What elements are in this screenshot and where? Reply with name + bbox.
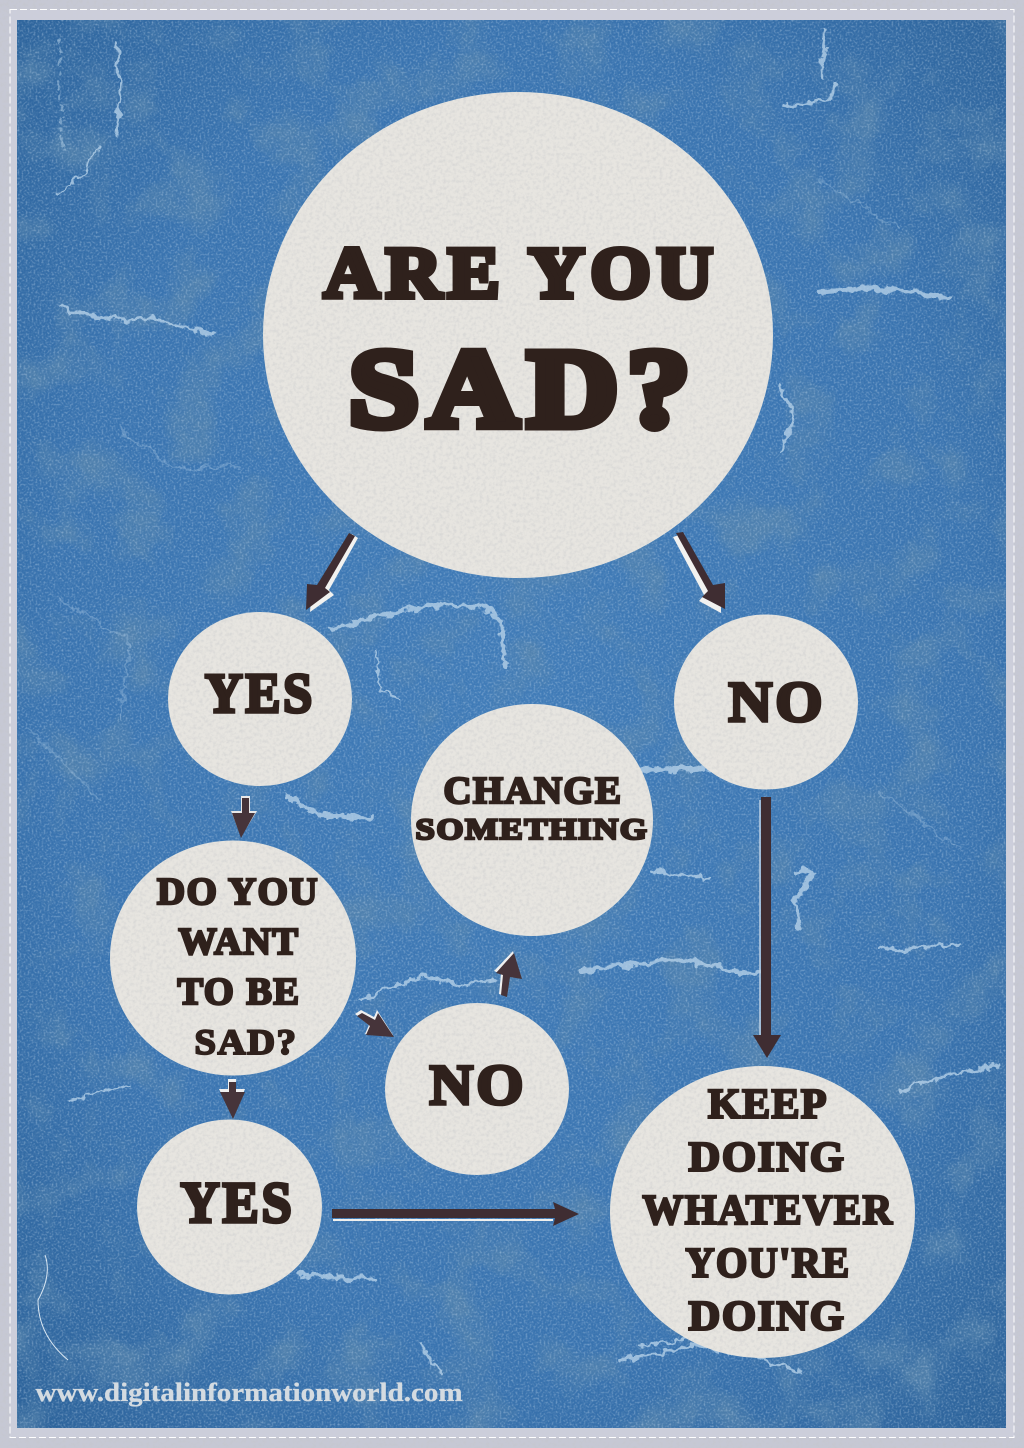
heading: are you: ARE YOU	[324, 233, 719, 313]
circle texture	[110, 92, 915, 1358]
arrow: big circle to yes	[306, 533, 358, 612]
circle: yes	[168, 612, 352, 786]
label: change something: SOMETHING	[416, 813, 648, 846]
label: keep doing whatever you're doing: WHATEVER	[642, 1188, 894, 1234]
label: do you want to be sad: DO YOU	[157, 871, 319, 913]
circle: yes lower	[137, 1120, 322, 1294]
label: keep doing whatever you're doing: DOING	[688, 1135, 846, 1181]
circle: keep doing	[610, 1066, 915, 1358]
label: no right: NO	[728, 671, 826, 734]
arrow: do you want to yes	[219, 1079, 245, 1119]
arrow: yes to do you want	[231, 796, 257, 838]
circle: no right	[674, 614, 858, 790]
label: keep doing whatever you're doing	[642, 1082, 894, 1340]
heading: sad: SAD?	[349, 328, 699, 451]
label: do you want to be sad: TO BE	[178, 971, 300, 1013]
label: no middle: NO	[430, 1054, 526, 1117]
circle: no middle	[385, 1003, 569, 1175]
label: keep doing whatever you're doing: DOING	[688, 1294, 846, 1340]
label: yes lower: YES	[180, 1170, 294, 1235]
label: change something	[416, 770, 648, 846]
arrow: do you want to no	[355, 1010, 394, 1037]
label: yes: YES	[205, 663, 315, 725]
arrow: no to keep doing	[753, 797, 781, 1058]
label: keep doing whatever you're doing: KEEP	[708, 1082, 828, 1128]
circle: change something	[411, 704, 653, 936]
arrow: yes to keep doing	[332, 1202, 579, 1226]
website url: www.digitalinformationworld.com	[36, 1377, 463, 1407]
label: change something: CHANGE	[444, 770, 622, 812]
crack: thin white line lower left	[38, 1255, 68, 1360]
arrow: no to change something	[494, 951, 522, 997]
arrow: big circle to no	[673, 532, 725, 613]
label: keep doing whatever you're doing: YOU'RE	[686, 1241, 850, 1287]
label: do you want to be sad: SAD?	[194, 1022, 298, 1062]
label: do you want to be sad	[157, 871, 319, 1062]
label: do you want to be sad: WANT	[178, 921, 300, 963]
circle: are you sad	[263, 92, 773, 578]
circle: do you want to be sad	[110, 840, 356, 1076]
